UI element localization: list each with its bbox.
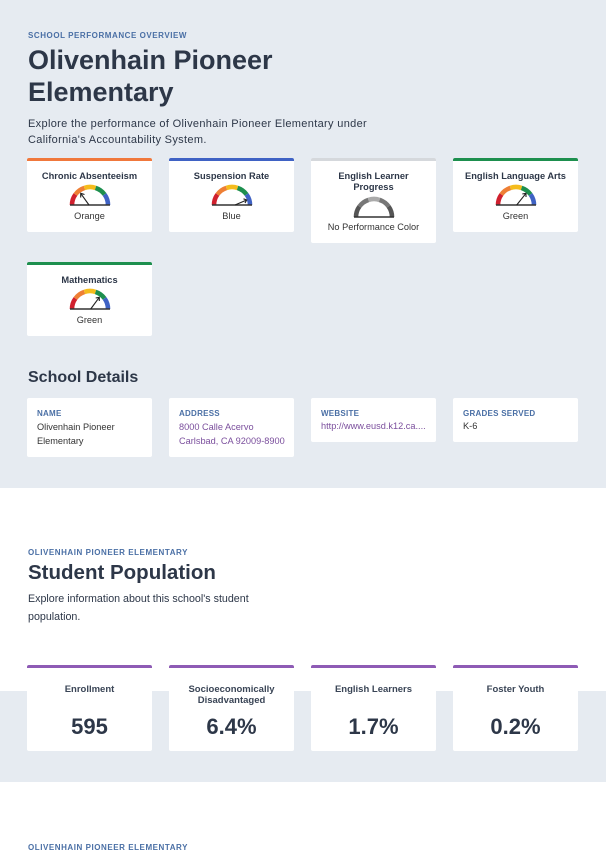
detail card: address bbox=[169, 398, 294, 457]
stat card: socioeconomically disadvantaged bbox=[169, 665, 294, 751]
icon: gauge gray bbox=[354, 196, 394, 218]
card: english learner progress: English Learner bbox=[338, 171, 409, 181]
card: mathematics: Green bbox=[77, 315, 102, 325]
title: Olivenhain Pioneer bbox=[28, 45, 273, 75]
stat card: foster youth: 0.2% bbox=[490, 714, 541, 739]
stat card: english learners: English Learners bbox=[335, 684, 412, 695]
stat card: socioeconomically disadvantaged: Socioeconomically bbox=[188, 684, 275, 695]
detail card: website: WEBSITE bbox=[321, 409, 359, 418]
stat card: english learners bbox=[311, 665, 436, 751]
stat card: foster youth bbox=[453, 665, 578, 751]
card: english language arts: English Language Arts bbox=[465, 171, 566, 181]
card: mathematics bbox=[27, 262, 152, 336]
icon: gauge blue bbox=[212, 184, 252, 206]
title: Elementary bbox=[28, 77, 174, 107]
detail card: address: ADDRESS bbox=[179, 409, 220, 418]
detail card: grades served: GRADES SERVED bbox=[463, 409, 535, 418]
card: chronic absenteeism: Orange bbox=[74, 211, 105, 221]
card: suspension rate: Suspension Rate bbox=[194, 171, 269, 181]
card: chronic absenteeism bbox=[27, 158, 152, 232]
detail card: website bbox=[311, 398, 436, 442]
population description: Explore information about this school's student bbox=[28, 593, 249, 605]
detail card: name: Olivenhain Pioneer bbox=[37, 422, 115, 432]
population description: population. bbox=[28, 611, 80, 623]
icon: gauge green bbox=[70, 288, 110, 310]
stat card: socioeconomically disadvantaged: 6.4% bbox=[206, 714, 257, 739]
title bbox=[28, 45, 273, 107]
detail card: name bbox=[27, 398, 152, 457]
card: chronic absenteeism: Chronic Absenteeism bbox=[42, 171, 137, 181]
stat card: english learners: 1.7% bbox=[348, 714, 399, 739]
card: english learner progress: No Performance Color bbox=[328, 222, 419, 232]
icon: gauge orange bbox=[70, 184, 110, 206]
eyebrow: next section: OLIVENHAIN PIONEER ELEMENTARY bbox=[28, 843, 188, 852]
card: suspension rate bbox=[169, 158, 294, 232]
detail card: grades served bbox=[453, 398, 578, 442]
card: english learner progress: Progress bbox=[353, 182, 394, 192]
detail card: name: NAME bbox=[37, 409, 62, 418]
stat card: foster youth: Foster Youth bbox=[487, 684, 544, 695]
band: population background bbox=[0, 691, 606, 782]
card: english learner progress bbox=[311, 158, 436, 243]
band: overview background bbox=[0, 0, 606, 488]
card: english language arts bbox=[453, 158, 578, 232]
eyebrow: school performance overview: SCHOOL PERFORMANCE OVERVIEW bbox=[28, 31, 187, 40]
eyebrow: student population section: OLIVENHAIN PIONEER ELEMENTARY bbox=[28, 548, 188, 557]
card: english language arts: Green bbox=[503, 211, 528, 221]
detail card: name: Elementary bbox=[37, 436, 83, 446]
stat card: enrollment bbox=[27, 665, 152, 751]
detail card: website: http://www.eusd.k12.ca.... bbox=[321, 421, 426, 431]
card: mathematics: Mathematics bbox=[61, 275, 118, 285]
stat card: enrollment: 595 bbox=[71, 714, 108, 739]
detail card: grades served: K-6 bbox=[463, 421, 477, 431]
detail card: address: Carlsbad, CA 92009-8900 bbox=[179, 436, 285, 446]
stat card: enrollment: Enrollment bbox=[65, 684, 114, 695]
card: suspension rate: Blue bbox=[222, 211, 241, 221]
intro text: Explore the performance of Olivenhain Pioneer Elementary under bbox=[28, 118, 367, 130]
stat card: socioeconomically disadvantaged: Disadvantaged bbox=[198, 695, 265, 706]
heading: school details: School Details bbox=[28, 369, 138, 386]
population description bbox=[28, 593, 249, 623]
detail card: address: 8000 Calle Acervo bbox=[179, 422, 254, 432]
intro text: California's Accountability System. bbox=[28, 134, 207, 146]
intro text bbox=[28, 118, 367, 146]
icon: gauge green bbox=[496, 184, 536, 206]
heading: student population: Student Population bbox=[28, 561, 216, 584]
